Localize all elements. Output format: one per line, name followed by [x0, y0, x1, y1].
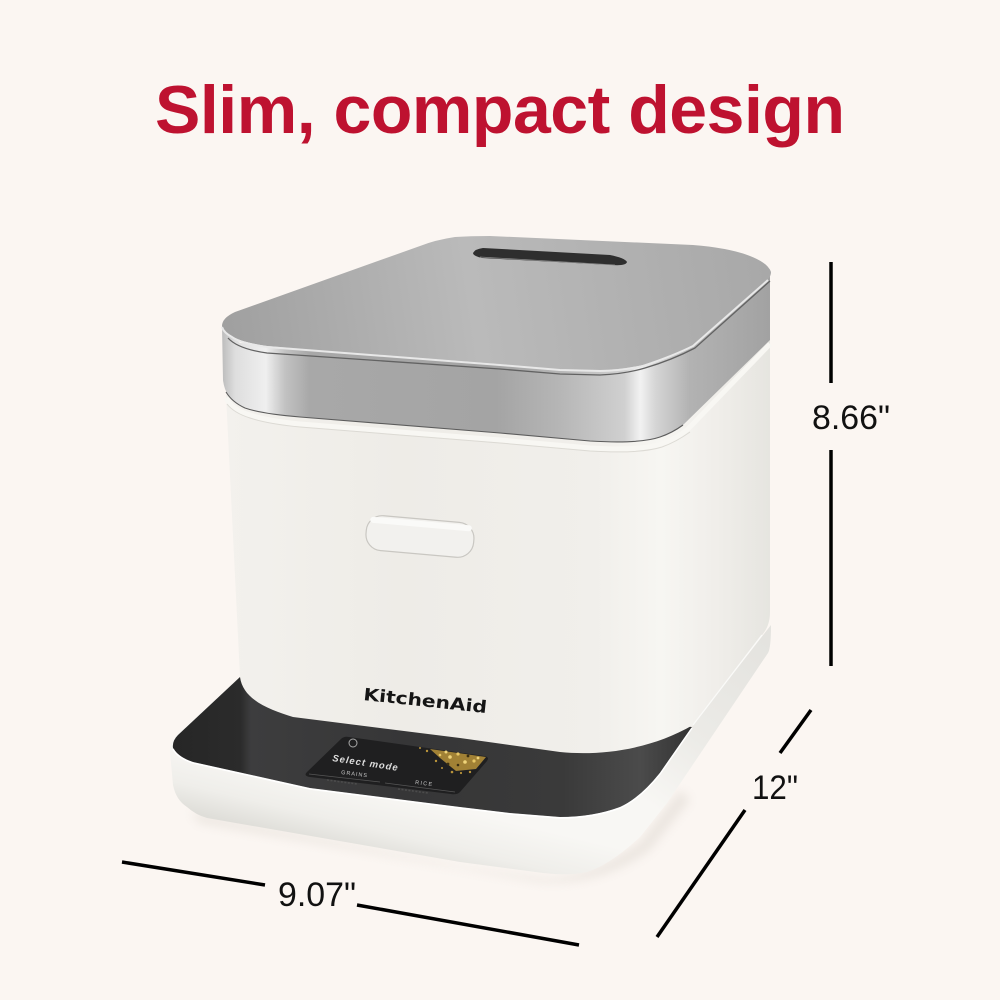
product: KitchenAid appliance: [170, 236, 771, 882]
handle: [365, 514, 475, 559]
base plate: [170, 625, 771, 874]
depth label: 12": [752, 769, 798, 807]
lid dark rim line: [228, 281, 770, 375]
screen divider lines: [309, 774, 455, 792]
power icon: [349, 739, 357, 747]
screen label rice: RICE: [415, 780, 433, 788]
band lower shadow line: [226, 392, 683, 442]
title: Slim, compact design: [155, 72, 845, 148]
screen label grains: GRAINS: [341, 770, 368, 779]
white seal under band: [226, 344, 770, 449]
lid top: [222, 236, 771, 370]
lid vent slot: [473, 248, 627, 265]
height label: 8.66": [812, 399, 890, 437]
body base highlight line: [693, 635, 762, 725]
dimension: depth 12 in: [657, 710, 811, 937]
lid edge highlight: [222, 280, 768, 371]
lid metal band: [222, 276, 770, 442]
brand logo: KitchenAid: [362, 685, 488, 718]
dimension: width 9.07 in: [122, 862, 579, 945]
control screen: [306, 737, 488, 794]
appliance body: [226, 335, 770, 753]
width label: 9.07": [278, 876, 356, 914]
screen gold image: [419, 747, 486, 774]
base right strip: [620, 625, 771, 837]
screen heading: Select mode: [332, 753, 399, 774]
glass panel white lip: [173, 728, 692, 818]
base shadow: [190, 790, 690, 882]
black glass panel: [173, 677, 692, 817]
